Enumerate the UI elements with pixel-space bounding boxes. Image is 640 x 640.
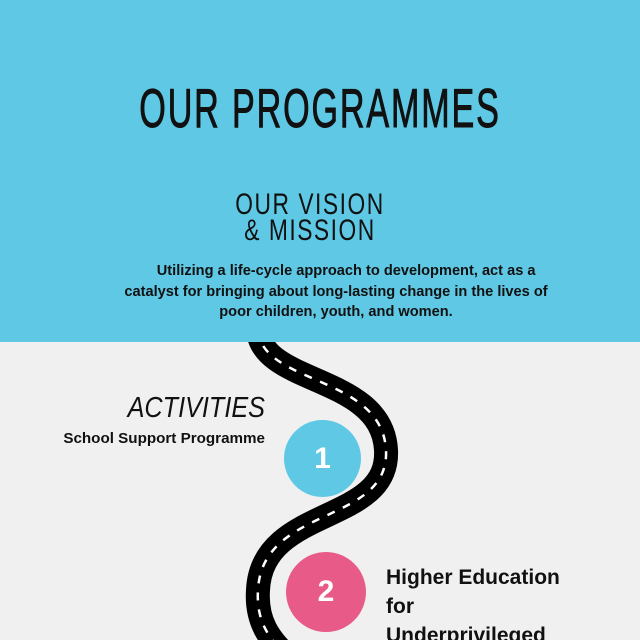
mission text: poor children, youth, and women.	[219, 304, 453, 320]
vision heading	[235, 188, 385, 247]
vision heading: OUR VISION	[235, 188, 385, 221]
road	[246, 342, 398, 640]
mission text: catalyst for bringing about long-lasting change in the lives of	[124, 284, 548, 300]
mission text	[124, 263, 548, 320]
mission text: Utilizing a life-cycle approach to development, act as a	[157, 263, 536, 279]
activity 2 label: Higher Education	[386, 566, 560, 589]
vision heading: & MISSION	[244, 214, 376, 247]
activity 2 label	[386, 566, 560, 640]
activity 2 label: for	[386, 595, 414, 618]
header panel	[0, 0, 640, 342]
title: OUR PROGRAMMES	[139, 77, 501, 139]
circle 1: 1	[314, 442, 331, 475]
circle 2	[286, 552, 366, 632]
activities heading: ACTIVITIES	[128, 392, 265, 424]
circle 2: 2	[318, 575, 334, 608]
circle 1	[284, 420, 361, 497]
activity 1 label: School Support Programme	[63, 430, 265, 447]
